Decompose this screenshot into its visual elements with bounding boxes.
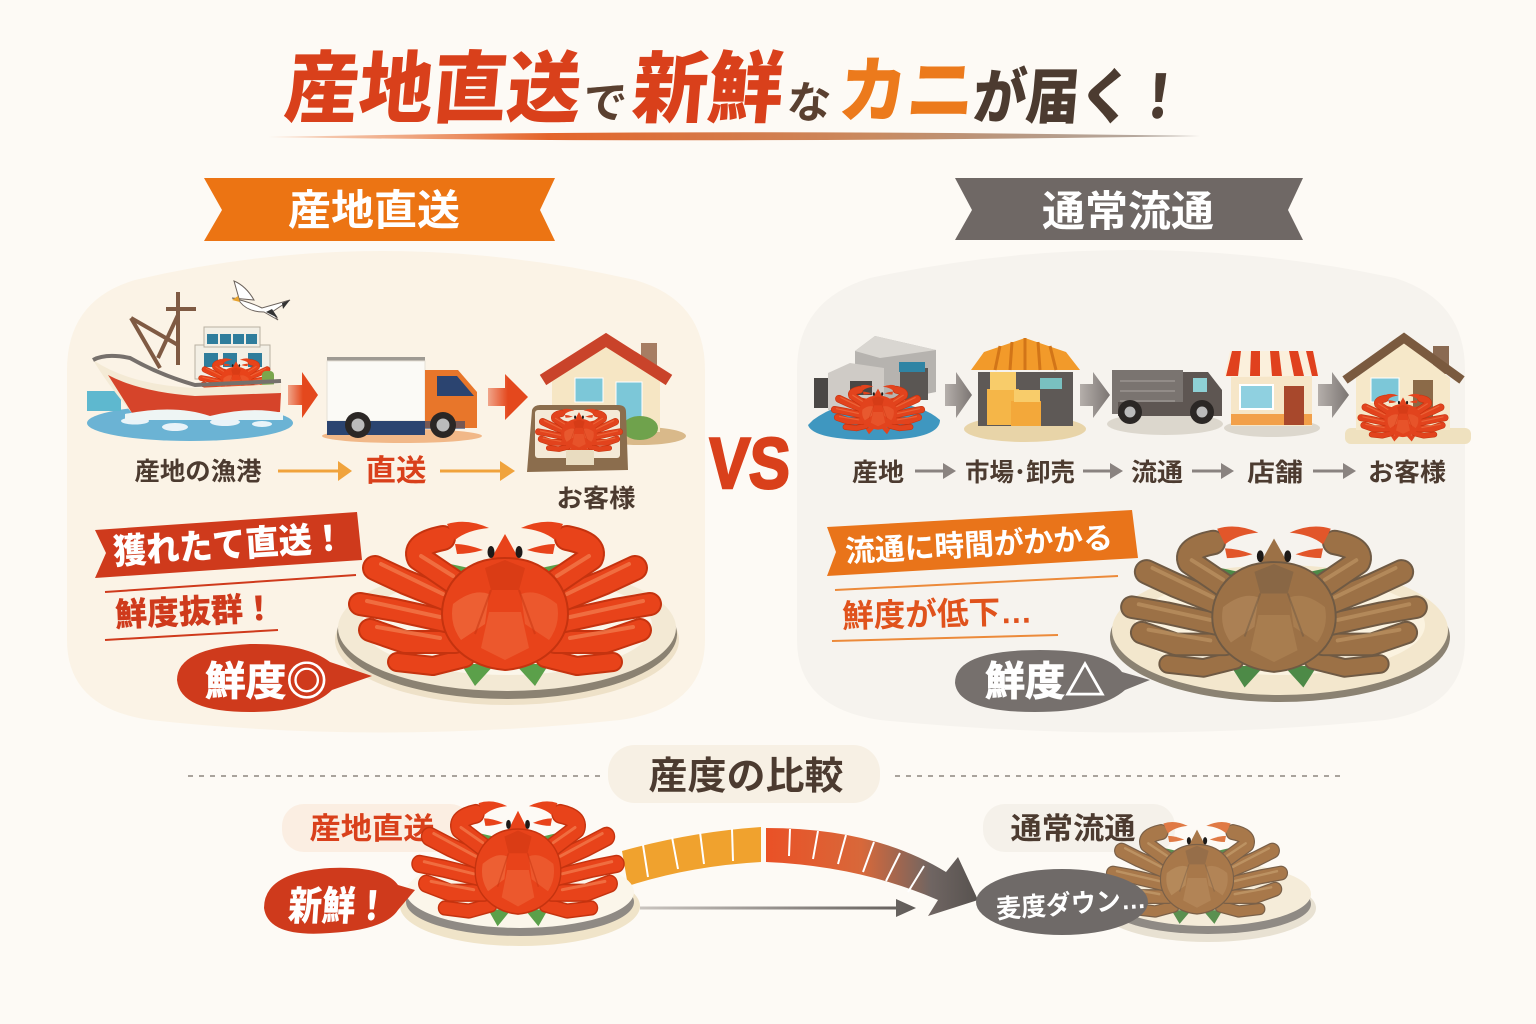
banner: direct shipping	[204, 178, 555, 241]
banner: normal distribution: 通常流通	[1042, 188, 1214, 235]
label pill: normal distribution: 通常流通	[1010, 813, 1136, 846]
arrow: market to truck	[1080, 372, 1110, 418]
title: カニ	[835, 52, 978, 132]
dashed divider left	[188, 775, 600, 777]
arrow: origin to market	[945, 372, 972, 418]
icon: gray distribution truck	[1107, 370, 1223, 435]
banner: direct shipping: 産地直送	[288, 187, 460, 234]
dashed divider right	[895, 775, 1345, 777]
icon: store	[1224, 351, 1320, 437]
arrow: boat to truck	[288, 372, 318, 418]
flow labels: normal distribution: お客様	[1368, 459, 1446, 487]
title underline	[268, 132, 1200, 140]
label pill: normal distribution	[983, 804, 1175, 852]
callout: takes time banner: 流通に時間がかかる	[844, 521, 1114, 569]
plate with small red crab	[400, 801, 640, 946]
arrow	[1192, 463, 1234, 479]
flow labels: direct shipping	[134, 455, 636, 513]
callout: fresh catch banner: 獲れたて直送！	[112, 519, 346, 572]
bubble: freshness double circle: 鮮度◎	[205, 660, 327, 704]
arrow: direct to customer	[440, 461, 515, 481]
arrow	[1313, 463, 1356, 479]
flow labels: normal distribution: 市場･卸売	[965, 459, 1075, 487]
bubble: freshness triangle: 鮮度△	[985, 660, 1105, 704]
VS mark: VS	[706, 424, 792, 504]
plate with dull crab	[1110, 527, 1450, 702]
flow labels: direct shipping: お客様	[556, 485, 636, 513]
flow labels: direct shipping: 直送	[366, 455, 426, 488]
title: 産地直送	[281, 45, 585, 133]
heading: freshness comparison	[608, 745, 880, 803]
flow labels: direct shipping: 産地の漁港	[134, 458, 262, 486]
flow labels: normal distribution	[852, 459, 1446, 487]
flow labels: normal distribution: 流通	[1131, 459, 1183, 487]
title: 新鮮	[629, 45, 787, 133]
gauge: fresh segment	[622, 827, 761, 886]
arrow: port to direct	[278, 461, 352, 481]
flow labels: normal distribution: 店舗	[1247, 459, 1303, 487]
arrow: straight time arrow	[640, 899, 916, 917]
callout: takes time banner	[827, 510, 1138, 576]
bubble: fresh: 新鮮！	[287, 885, 390, 929]
gauge: freshness drop arrow	[766, 828, 978, 916]
banner: normal distribution	[955, 178, 1303, 240]
title: が届く！	[971, 64, 1188, 131]
bubble: freshness down: 麦度ダウン…	[995, 884, 1147, 924]
arrow: store to house	[1318, 372, 1349, 418]
panel: normal distribution	[797, 250, 1465, 732]
icon: wholesale market	[964, 338, 1086, 442]
icon: customer house with crab card	[527, 340, 686, 472]
bubble: fresh	[264, 868, 415, 934]
icon: seagull	[232, 281, 290, 320]
icon: white delivery truck	[322, 357, 482, 443]
bubble: freshness triangle	[955, 650, 1150, 712]
icon: fishing boat	[87, 292, 293, 441]
bubble: freshness down	[976, 869, 1148, 935]
icon: warehouse at origin with crab	[808, 336, 940, 440]
label pill: direct shipping	[282, 804, 472, 852]
icon: customer house with crab	[1345, 338, 1471, 444]
title: な	[785, 79, 833, 128]
title	[281, 45, 1188, 133]
panel: direct shipping	[67, 251, 705, 732]
callout: excellent freshness: 鮮度抜群！	[114, 590, 276, 633]
title: で	[581, 79, 629, 128]
flow labels: normal distribution: 産地	[852, 459, 904, 487]
plate with small dull crab	[1100, 822, 1316, 942]
label pill: direct shipping: 産地直送	[310, 813, 434, 846]
VS mark: VS	[706, 424, 792, 504]
plate with red crab	[335, 522, 679, 705]
arrow: truck to house	[488, 374, 528, 420]
arrow	[1083, 463, 1123, 479]
callout: freshness declines: 鮮度が低下…	[842, 594, 1032, 634]
heading: freshness comparison: 産度の比較	[648, 756, 844, 798]
bubble: freshness double circle	[177, 644, 372, 712]
arrow	[915, 463, 956, 479]
